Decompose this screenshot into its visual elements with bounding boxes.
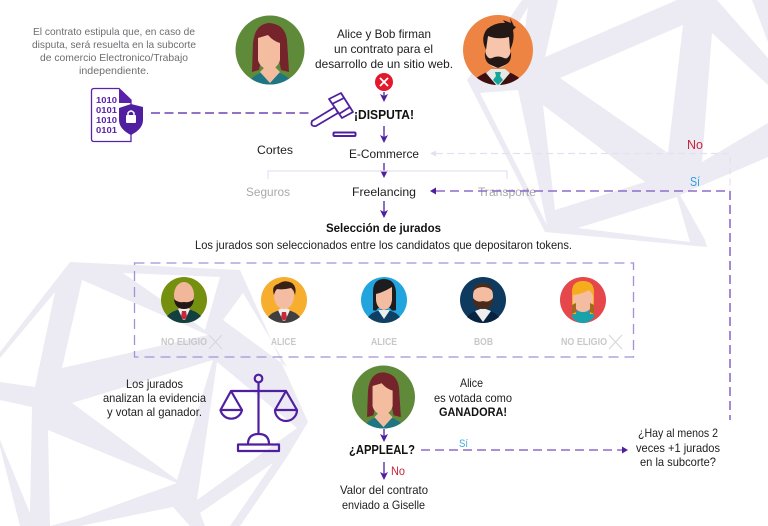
juror 1 label: NO ELIGIO [161,337,207,348]
icon: scales [220,375,297,451]
label: Freelancing: Freelancing [352,185,416,199]
text: Alice and Bob sign [315,27,453,71]
arrow: to appeal [383,429,385,440]
arrow: Si path [430,188,730,420]
heading: juror selection: Selección de jurados [326,221,441,235]
text: contract value: Valor del contrato [340,483,428,497]
text: contract clause: de comercio Electronico/Trabajo [40,52,188,64]
arrows: main flow [383,92,385,216]
text: question jurors [636,426,720,469]
label: Seguros: Seguros [246,185,290,199]
text: jurors analyze: y votan al ganador. [107,405,202,419]
text: contract value: enviado a Giselle [342,498,425,512]
label: E-Commerce: E-Commerce [349,147,419,161]
juror 3 [361,277,407,323]
text: Alice wins: es votada como [434,391,512,405]
juror 2 [261,277,307,323]
text: Alice and Bob sign: Alice y Bob firman [337,27,431,41]
panel: jurors [134,263,634,357]
arrow: No path [430,150,730,191]
juror 5 label [561,335,622,349]
icon: gavel [312,93,356,136]
juror 4 [460,277,506,323]
text: Alice and Bob sign: desarrollo de un sitio web. [315,57,453,71]
text: question jurors: veces +1 jurados [636,441,720,455]
text: Alice wins: GANADORA! [439,405,507,419]
arrow: appeal yes [421,446,628,454]
text: jurors analyze [103,377,206,419]
background polyhedron bottom left [0,262,308,526]
text: contract clause: disputa, será resuelta en la subcorte [32,39,196,51]
juror 2 label: ALICE [271,337,296,348]
label: No top: No [687,137,703,152]
label: Si top: Sí [690,174,700,189]
icon: secure document: 1010 [96,96,118,105]
juror 5 label: NO ELIGIO [561,337,607,348]
text: contract clause [32,26,196,77]
juror 1 label [161,335,222,349]
text: Alice wins [434,376,512,419]
dashed link document to gavel [151,112,312,114]
background polyhedron top right [467,0,768,247]
heading: appeal: ¿APPLEAL? [349,442,415,457]
arrow: appeal no [383,462,385,478]
label: No appeal: No [391,466,405,478]
avatar: Bob top [463,15,533,90]
text: contract clause: El contrato estipula que, en caso de [33,26,195,38]
avatar: Alice winner [352,366,415,430]
text: contract clause: independiente. [79,65,149,77]
juror 5 [560,277,606,323]
icon: secure document: 0101 [96,106,118,115]
juror 1 [161,277,207,323]
text: question jurors: en la subcorte? [640,455,716,469]
bracket: subcourts [268,171,507,179]
icon: secure document [92,88,143,142]
text: Alice wins: Alice [460,376,483,390]
label: Si appeal: Sí [459,438,468,450]
heading: dispute: ¡DISPUTA! [354,107,414,122]
text: question jurors: ¿Hay al menos 2 [638,426,718,440]
text: juror selection description: Los jurados son seleccionados entre los candidatos que depositaron tokens. [195,238,572,252]
juror 3 label: ALICE [371,337,397,348]
text: jurors analyze: analizan la evidencia [103,391,206,405]
icon: red cross [375,73,393,91]
text: jurors analyze: Los jurados [126,377,183,391]
icon: secure document: 1010 [96,116,118,125]
avatar: Alice top [236,16,304,86]
text: Alice and Bob sign: un contrato para el [334,42,433,56]
icon: secure document: 0101 [96,126,118,135]
label: courts: Cortes [257,143,293,157]
juror 4 label: BOB [474,337,493,348]
label: Transporte: Transporte [478,185,536,199]
text: contract value [340,483,428,512]
